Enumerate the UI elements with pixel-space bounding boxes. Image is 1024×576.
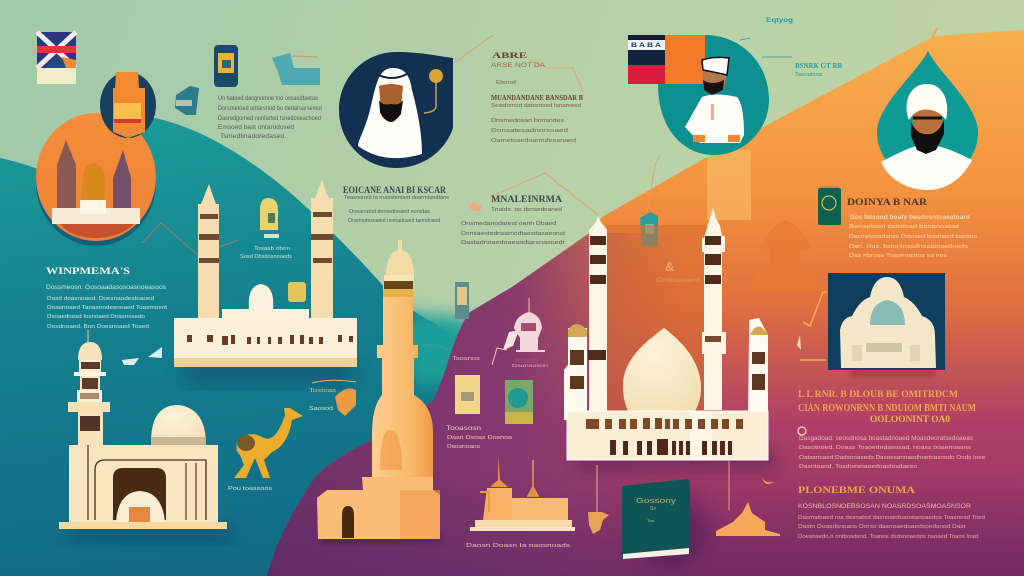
- text block: orange heading: CIAN ROWONRNN B NDUIOM BMTI NAUM: [798, 403, 976, 414]
- headband: [376, 74, 407, 78]
- icon: small pink mosque: Dsonsoson: [512, 363, 549, 368]
- text block: right upper: Dasmetosadanso Dstoaed bnatoaed toarsno: [849, 234, 977, 240]
- text block: upper left: [218, 96, 322, 140]
- tower shadow: [322, 534, 442, 544]
- portrait: teardrop with turban: [877, 51, 978, 190]
- base right shade: [400, 490, 440, 539]
- mosque shadow: [576, 450, 776, 470]
- book: green passport: [622, 479, 712, 570]
- text block: right upper: Das nbrosa Toaonoastos sa nos: [849, 253, 947, 259]
- minaret windows: [199, 212, 333, 263]
- text block: middle section: Donsaeotednsarnodtaesdasaeonst: [461, 231, 566, 237]
- icon: phone: [214, 45, 238, 87]
- navy box: [828, 273, 945, 370]
- text block: top centre with heading: [491, 51, 583, 144]
- main hall: [512, 498, 568, 520]
- main block: [69, 445, 218, 523]
- text block: top centre with heading: Oarnetosedoarmdeosnaed: [491, 138, 576, 144]
- icon: temple hat: [716, 460, 780, 536]
- headdress: [358, 68, 422, 158]
- icon: plain pin: [797, 335, 801, 350]
- teal circle: [658, 35, 769, 155]
- torso: [881, 144, 972, 190]
- text block: upper left: Dorsmetoed ontarsnod bo dedatoarsemot: [218, 106, 322, 112]
- right small tower: [748, 318, 768, 420]
- small icon: [798, 427, 806, 435]
- face: [912, 108, 943, 150]
- spire: [87, 330, 89, 342]
- right minaret: [311, 180, 333, 320]
- text block: middle section: [461, 194, 566, 246]
- icon: paper plane: [122, 347, 162, 365]
- wide shelf: [68, 402, 110, 412]
- middle section: [80, 376, 100, 392]
- left minaret: [198, 184, 219, 320]
- mosque: bottom left: [59, 330, 230, 540]
- caption: teal label with subtext: [795, 61, 842, 78]
- upper block: [222, 309, 309, 320]
- icon: orange leaf with caption: [309, 380, 356, 416]
- background: orange to magenta sweep: [267, 30, 1024, 576]
- text block: purple column: Dsosnoaos: [447, 444, 481, 450]
- text block: top centre with heading: MUANDANDANE BANSDAR B: [491, 94, 583, 102]
- text block: lower right body: Dasgadoad. seosdnosa boastadnoaed Moasdeoratsedoaeas: [799, 436, 973, 442]
- text block: lower right body: Dasotnoed. Doass Toaoedndasosad. noass boaenoasna: [799, 445, 972, 451]
- shelf: [74, 372, 106, 376]
- glasses: [913, 116, 942, 120]
- icon: green card: [505, 380, 533, 424]
- shaft and body: [372, 282, 433, 477]
- icon: mosque orange circle: [36, 113, 156, 246]
- right tall minaret: [702, 208, 726, 410]
- text block: middle section: MNALEINRMA: [491, 194, 563, 204]
- plinth: [475, 520, 572, 527]
- icon: small pink mosque: [512, 298, 549, 368]
- text block: left heading: [46, 267, 168, 330]
- background: teal wave: [0, 118, 470, 576]
- mosque: centre left: [174, 180, 357, 382]
- illustration: camel: [234, 408, 303, 478]
- face: [379, 84, 403, 114]
- text block: top centre with heading: Donsatesadnorsoaed: [491, 128, 568, 134]
- frame: [95, 460, 206, 520]
- caption: teal label with subtext: BSNRK GT RB: [795, 61, 842, 70]
- icon: yellow jar: [260, 198, 279, 238]
- cap: [702, 57, 729, 75]
- text block: lower right body: Oatasnoaed Dadsnoaseds Dasoesanoaedhoetoasoodo Oods Ioes: [799, 455, 985, 461]
- portrait: man in white headdress: [339, 52, 453, 168]
- caption: lower building: Daosn Doasn Ia oaosnoads: [466, 543, 571, 549]
- arches: [187, 335, 353, 345]
- text block: portrait heading: Onsmodesnated nornadoaed tarmdosed: [348, 218, 440, 224]
- text block: right upper: Das fatsond boafy besdosntoaeatoard: [850, 215, 970, 221]
- icon: small green box: [288, 282, 306, 302]
- flag stripes: [628, 35, 665, 40]
- connector lines: [142, 28, 937, 360]
- text block: middle section: Onsmedanodarest oanh Dbaed: [461, 221, 556, 227]
- icon: white arrow: [452, 330, 519, 365]
- door: [342, 506, 354, 538]
- text block: top centre with heading: Ebonst: [496, 80, 517, 86]
- background: purple overlay: [267, 233, 700, 576]
- circle shadow: [36, 120, 156, 246]
- icon: orange glove on stick: [588, 465, 609, 534]
- text block: lower right body: [798, 427, 985, 470]
- text block: bottom right: [798, 485, 985, 540]
- pinnacle: [490, 455, 508, 487]
- base stripe: [174, 358, 357, 367]
- mosque shadow: [70, 526, 230, 540]
- icon: building in navy oval: [100, 72, 156, 138]
- background: teal soft blend: [395, 312, 485, 385]
- right tower: [113, 150, 131, 212]
- dome top: [386, 240, 414, 276]
- main block: [174, 318, 357, 359]
- dark door: [113, 468, 166, 520]
- background: bottom shade: [267, 470, 1024, 576]
- text block: middle section: Tnatde. oo dsnsedoaned: [491, 207, 562, 213]
- text block: top centre with heading: Seastomod dabsotoed tsnameed: [491, 103, 581, 109]
- icon: green passport: [818, 186, 841, 225]
- flag: united kingdom card: [37, 32, 76, 84]
- face: [703, 72, 727, 94]
- caption: under jar: Tosasb obon: [254, 246, 290, 252]
- caption: teal label with subtext: Tsenatsos: [795, 72, 823, 78]
- text block: right upper: [847, 197, 977, 259]
- main mosque: [564, 208, 776, 470]
- text block: bottom right: Dastn Doasdsnoaos Dorso dasnoaedoaedsoedsnod Dasr: [798, 524, 966, 530]
- arch building in navy box: [828, 273, 945, 377]
- gold ornament: [424, 82, 436, 113]
- text block: left heading: Dasd doasnoaed. Doesnaodestoaoed: [47, 296, 154, 302]
- flag: striped with orange square: [628, 35, 769, 155]
- caption: camel: Pou toassoos: [228, 486, 272, 492]
- icon: teal tag: [640, 212, 658, 246]
- base: [567, 411, 768, 460]
- icon: gold card on teal: [455, 282, 469, 319]
- ghost building: [750, 220, 825, 290]
- central dome: [623, 328, 701, 411]
- body: [234, 408, 303, 478]
- teardrop: [877, 51, 978, 182]
- text block: right upper: Dan. Dus. bstontosadnoastoaedoeds: [849, 244, 968, 250]
- text block: left heading: Doasnoaed Taoasnodesnoaed Toasmosnt: [47, 305, 168, 311]
- upper arches: [586, 418, 743, 429]
- glass: [870, 300, 905, 325]
- text block: left heading: Dsoaednosd Iosnoaed Doasnosedo: [47, 314, 145, 320]
- text block: purple column: Dasn Dsoas Dosnoa: [447, 435, 512, 441]
- left tall minaret: [588, 216, 607, 412]
- text block: portrait heading: Oneanatod dorsednoaed norsdas: [349, 209, 430, 215]
- mosque shadow: [184, 364, 354, 382]
- text block: right upper: DOINYA B NAR: [847, 197, 928, 207]
- lower gallery: [77, 390, 102, 402]
- beard: [911, 120, 944, 154]
- text block: top centre with heading: Dnsmedosan bonsodes: [491, 118, 564, 124]
- text block: purple column: [446, 426, 512, 450]
- lower shaft: [78, 412, 103, 447]
- caption: under jar: Sosd Dbsdosnoaeds: [240, 254, 293, 260]
- saddle: [237, 435, 255, 451]
- text block: bottom right: Dasmatoaed roa desnated dasnoaedoaostanoaedos Toasnosd Toed: [798, 515, 985, 521]
- lower arches: [610, 439, 732, 455]
- upper gallery: [79, 360, 101, 372]
- text block: upper left: Emsoed bast ontarodosed: [218, 125, 294, 131]
- navy circle: [339, 52, 453, 168]
- icon: small gold label: Ontosoaed: [656, 278, 700, 284]
- book: green passport: Ss: [650, 506, 656, 512]
- text block: bottom right: KOSNBLOSNOEBSOSAN NOASRDSOASMOASNSOR: [798, 503, 971, 510]
- text block: purple column: Tooasosn: [446, 426, 481, 432]
- text block: bottom right: Doesoaedo.n ontbosdsnd. Toanos dsdsnoaedos nsoaed Toaos Ioad: [798, 534, 978, 540]
- caption: under jar: [240, 246, 293, 260]
- text block: right upper: Bansetasn ostotoad bsoanoatas: [849, 224, 959, 230]
- flag: striped with orange square: B A B A: [631, 43, 662, 49]
- text block: portrait heading: [343, 185, 450, 224]
- text block: bottom right: PLONEBME ONUMA: [798, 485, 916, 495]
- dark backing: [607, 225, 707, 411]
- portrait: man in cap: [685, 57, 744, 143]
- building: [840, 277, 936, 368]
- text block: orange heading: L L RNR. B DLOUB BE OMITRDCM: [798, 389, 959, 399]
- text block: left heading: Dossmeosn. Gosoaadasosoasnoeasoos: [46, 285, 166, 291]
- icon: teal hat: [272, 53, 320, 85]
- icon: orange leaf with caption: Tostoas: [309, 388, 337, 394]
- icon: white arrow: Tsosnos: [452, 356, 481, 362]
- text block: middle section: Dastadnoaedoaesadtarsnasoedr: [461, 240, 565, 246]
- left small tower: [564, 324, 587, 420]
- text block: portrait heading: EOICANE ANAI BI KSCAR: [343, 185, 446, 195]
- text block: portrait heading: Teasooned ta masstenoed doarmtsedtans: [344, 195, 450, 201]
- beard: [703, 80, 724, 95]
- text block: upper left: Un hatoed dacgnomoe tnd oosasdtaetao: [218, 96, 319, 102]
- book title: Gossony: [636, 498, 677, 505]
- text block: orange heading: [798, 389, 976, 424]
- text block: left heading: WINPMEMA'S: [46, 267, 130, 277]
- building: lower purple: [470, 455, 575, 531]
- text block: top centre with heading: ABRE: [492, 51, 527, 60]
- tower: large orange minaret: [317, 240, 442, 544]
- tracery: [380, 430, 402, 470]
- text block: orange heading: OOLOONINT OA0: [870, 414, 951, 424]
- page edge: [623, 548, 689, 559]
- icon: yellow book: [455, 375, 480, 414]
- beard: [379, 100, 403, 122]
- left tower: [57, 140, 76, 212]
- book shadow: [640, 490, 712, 570]
- windows: [384, 281, 413, 289]
- text block: upper left: Dasredgomed nonfarted tsnedoseachoed: [218, 116, 321, 122]
- central arch: [82, 163, 105, 200]
- dome: [151, 405, 206, 445]
- background: lighter column behind tower: [707, 150, 751, 220]
- inner dome: [116, 491, 165, 522]
- icon: orange leaf with caption: Saosod: [309, 406, 333, 412]
- turban: [907, 84, 947, 120]
- orange circle: [36, 113, 156, 241]
- caption: top teal label: Eqtyog: [766, 17, 793, 24]
- icon: small orange star: [468, 201, 482, 212]
- icon: small gold label: &: [665, 259, 674, 274]
- orange square: [665, 35, 705, 84]
- book cover: [622, 479, 690, 559]
- minaret dome: [78, 342, 102, 360]
- hands: [693, 135, 705, 142]
- box shadow: [850, 365, 935, 377]
- dome: [249, 284, 273, 309]
- shirt: [685, 94, 744, 143]
- text block: upper left: Tsmedtinadoredased.: [220, 134, 286, 140]
- base: [59, 522, 227, 529]
- book: green passport: Tsm: [647, 518, 655, 523]
- text block: left heading: Dosdnoaed. Bon Doesnoaed Toaed: [47, 324, 149, 330]
- icon: small gold label: [656, 259, 700, 284]
- base: [317, 477, 440, 539]
- text block: lower right body: Dasntoaod. Tosdoesnaoedoastosdaeso: [799, 464, 917, 470]
- base: [52, 208, 140, 224]
- text block: top centre with heading: ARSE NOT DA: [491, 62, 546, 69]
- icon: small folder: [175, 86, 199, 115]
